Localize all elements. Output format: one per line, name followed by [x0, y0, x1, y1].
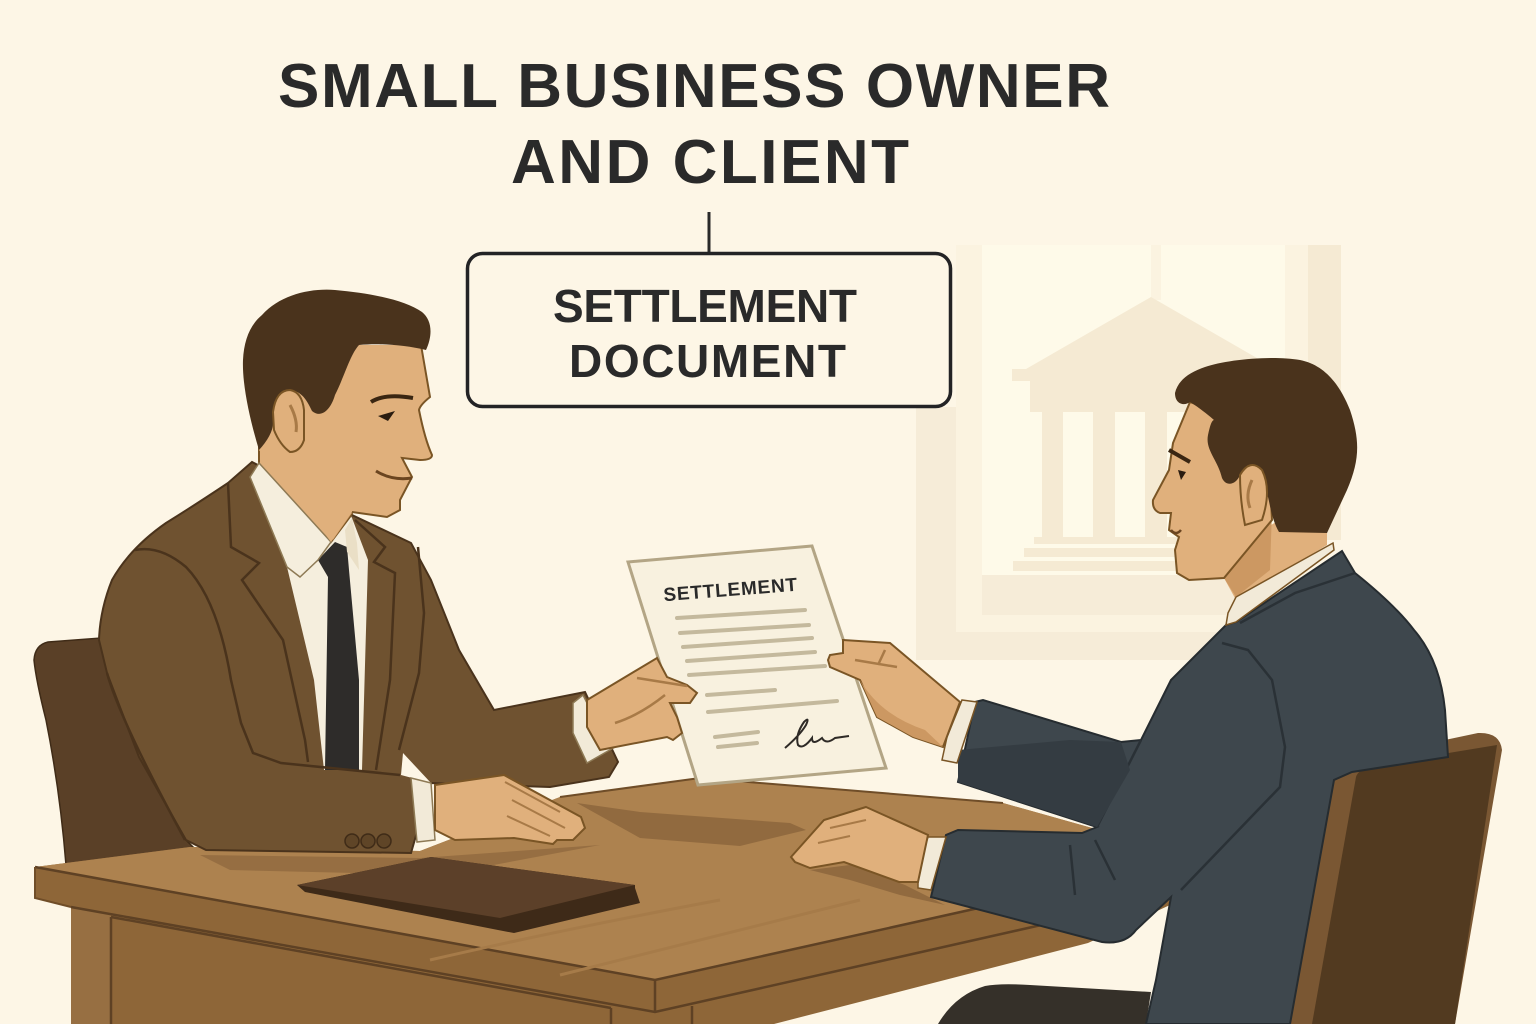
lapels and seams	[107, 483, 424, 840]
cuffs	[942, 700, 977, 763]
background notch between arm and torso	[401, 753, 431, 783]
label box: settlement document	[468, 254, 950, 406]
wood grain	[430, 900, 860, 975]
client hand holding paper	[828, 640, 960, 747]
eye, brow, mouth	[1169, 450, 1190, 462]
settlement paper: SETTLEMENT	[663, 575, 798, 606]
hand on table	[435, 775, 585, 844]
folder	[297, 857, 640, 933]
jacket	[931, 551, 1448, 1024]
face	[1153, 402, 1272, 580]
eye, brow, mouth	[371, 396, 413, 402]
owner hand holding paper	[587, 658, 697, 750]
cuffs	[411, 778, 435, 842]
hair	[1175, 358, 1357, 533]
background window with courthouse	[916, 245, 1341, 660]
label box: settlement document: SETTLEMENT	[553, 280, 857, 332]
sleeve buttons	[345, 834, 391, 848]
table shadow under paper	[577, 803, 806, 846]
connector line	[708, 212, 710, 254]
title: SMALL BUSINESS OWNER	[278, 52, 1110, 121]
collar	[250, 463, 331, 577]
collar	[1226, 543, 1334, 625]
neck	[259, 440, 352, 542]
right man: client	[791, 358, 1448, 1024]
neck	[1200, 520, 1327, 600]
ear	[273, 390, 304, 452]
shirt	[259, 463, 368, 770]
hair	[243, 290, 431, 450]
title	[278, 52, 1110, 197]
left man: owner	[99, 290, 618, 853]
label box: settlement document: DOCUMENT	[569, 335, 846, 387]
courthouse	[1012, 297, 1290, 571]
settlement paper	[628, 546, 886, 785]
title: AND CLIENT	[511, 128, 909, 197]
tie	[318, 542, 359, 770]
hand on table	[791, 807, 928, 882]
face	[259, 345, 432, 542]
table	[35, 778, 1170, 1024]
trousers	[938, 984, 1151, 1024]
jacket	[99, 462, 618, 853]
right chair	[1290, 733, 1502, 1024]
left chair	[34, 638, 196, 868]
ear	[1240, 465, 1267, 525]
signature	[785, 720, 849, 748]
